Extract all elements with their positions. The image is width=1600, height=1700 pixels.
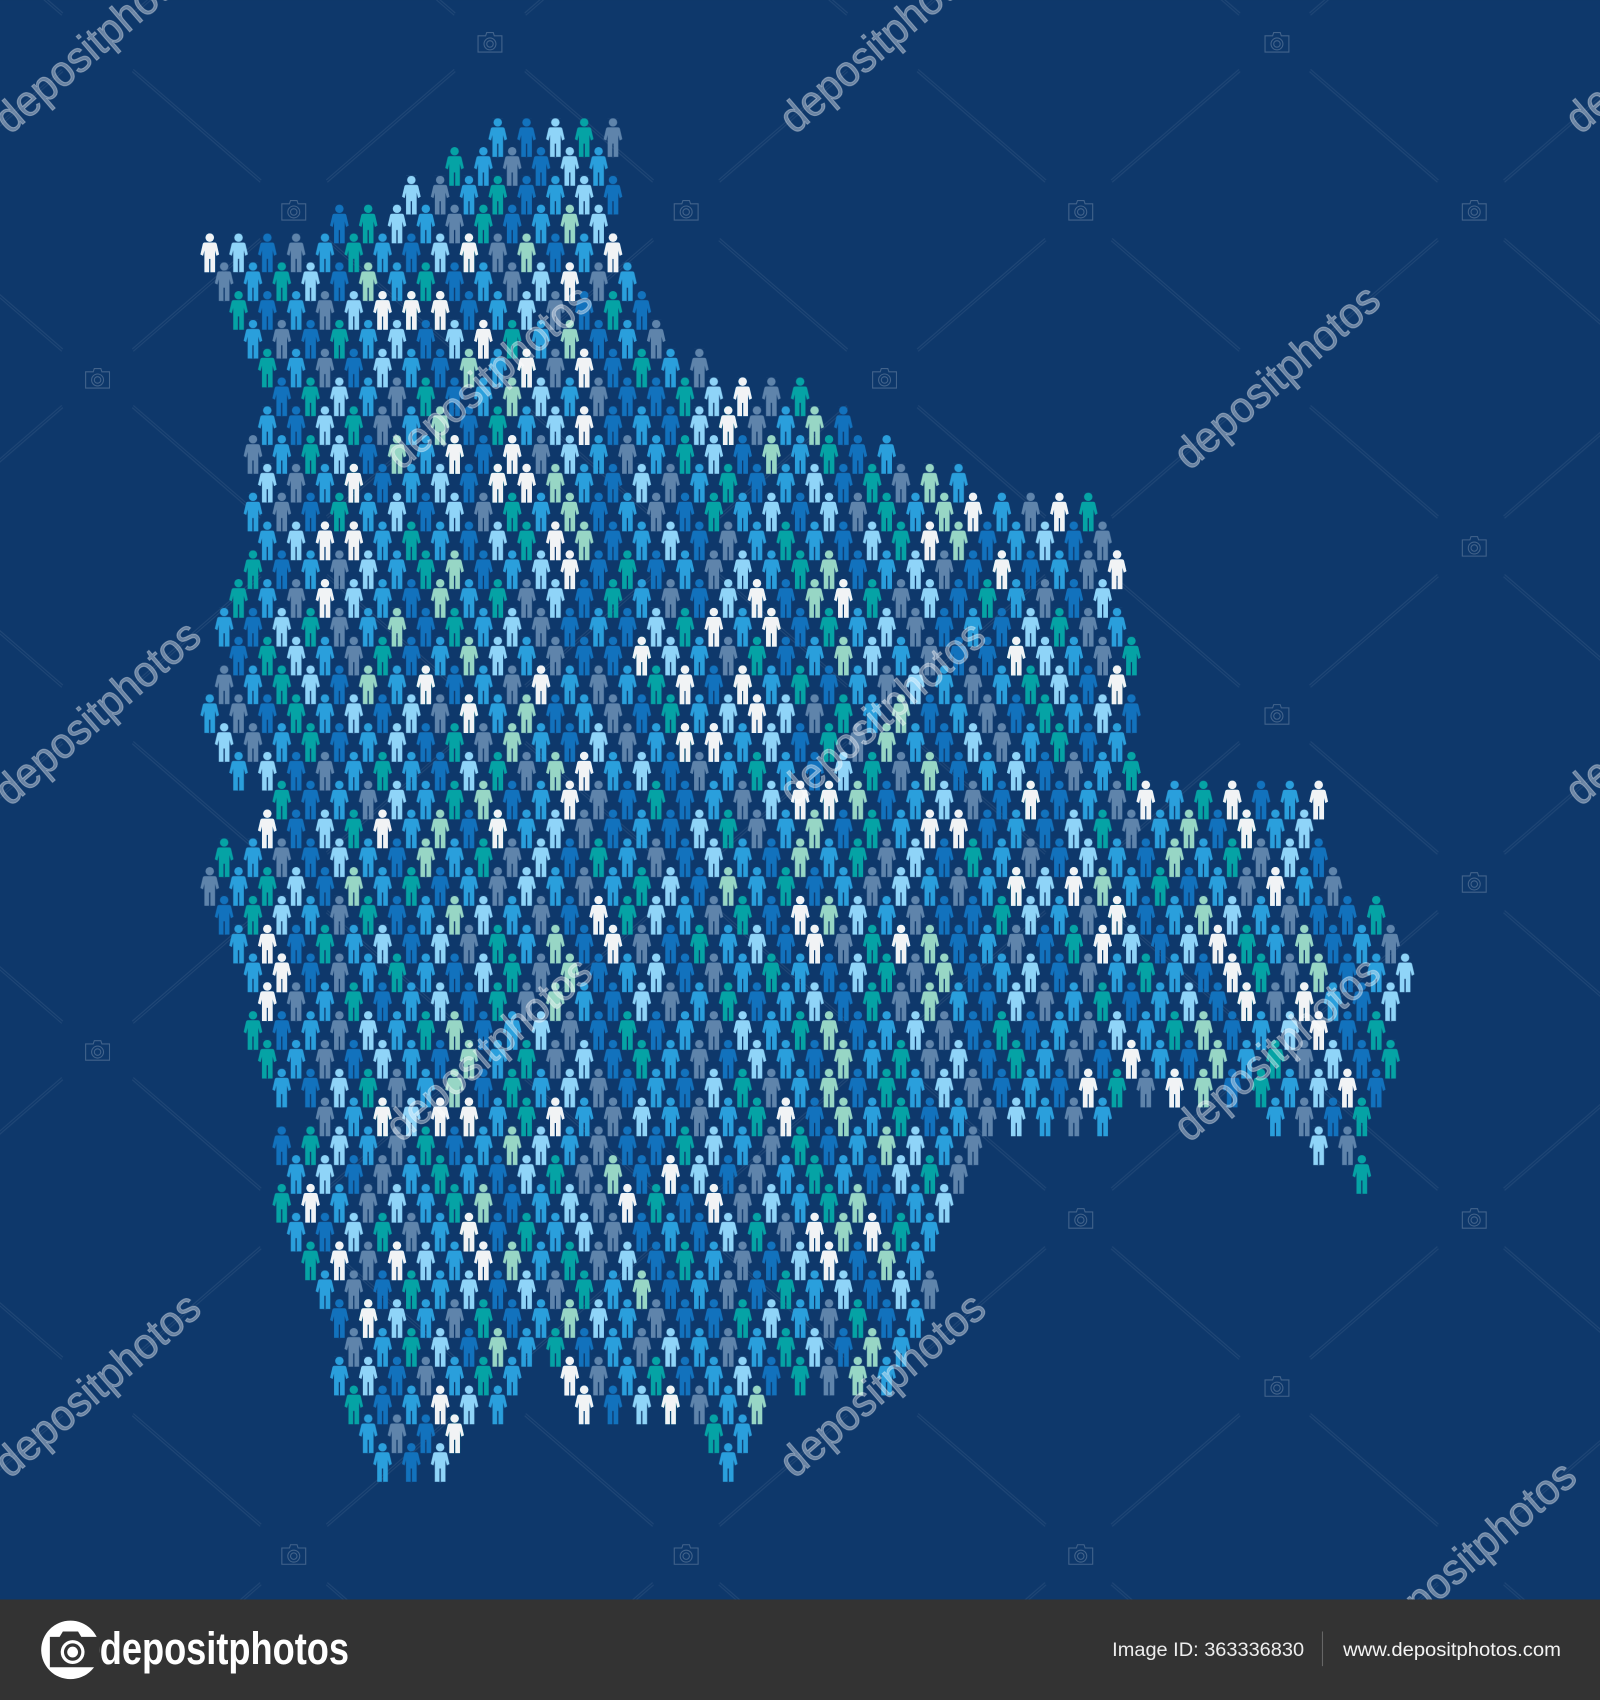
map of Bolivia made of people figures bbox=[195, 118, 1419, 1482]
watermark camera icons bbox=[86, 33, 1486, 1564]
diagonal depositphotos watermarks: depositphotos bbox=[376, 947, 601, 1151]
website url: www.depositphotos.com bbox=[1342, 1639, 1561, 1661]
icon: depositphotos camera logo bbox=[41, 1621, 100, 1679]
diagonal depositphotos watermarks: depositphotos bbox=[376, 275, 601, 479]
footer bar bbox=[0, 1599, 1600, 1700]
diagonal depositphotos watermarks: depositphotos bbox=[1165, 275, 1390, 479]
white figures scattered over the map bbox=[200, 233, 1357, 1453]
diagonal depositphotos watermarks: depositphotos bbox=[1165, 947, 1390, 1151]
diagonal depositphotos watermarks: depositphotos bbox=[770, 1283, 995, 1487]
diagonal depositphotos watermarks: depositphotos bbox=[1361, 1451, 1586, 1655]
diagonal depositphotos watermarks: depositphotos bbox=[770, 611, 995, 815]
image id: Image ID: 363336830 bbox=[1112, 1639, 1304, 1661]
footer logo wordmark: depositphotos bbox=[100, 1623, 349, 1674]
